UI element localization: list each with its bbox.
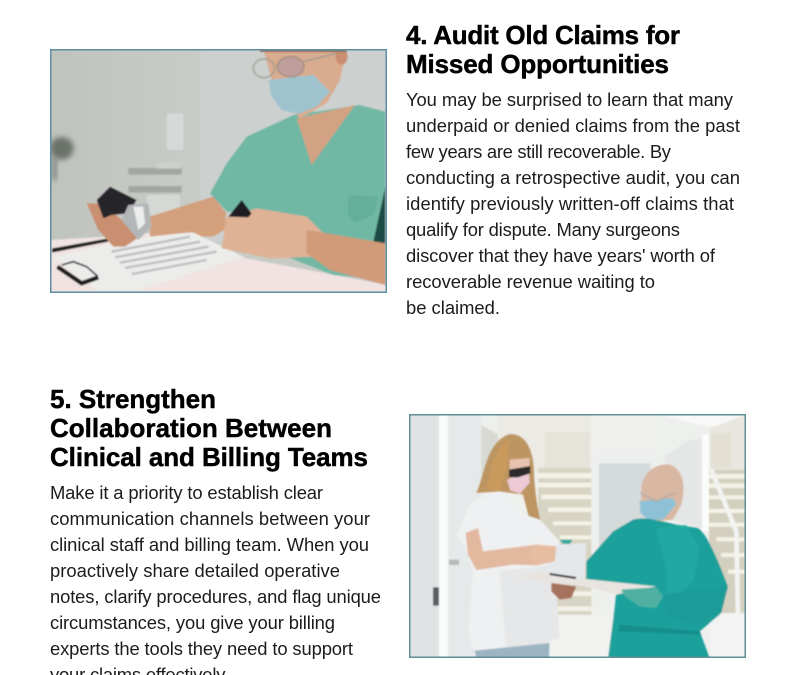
neck, head <box>263 49 347 118</box>
nurse face and mask <box>510 458 530 495</box>
text block: section 4 body: few years are still recoverable. By <box>406 141 672 162</box>
text block: section 5 body: proactively share detailed operative <box>50 560 340 581</box>
text block: section 4 body: recoverable revenue waiting to <box>406 271 655 292</box>
glasses <box>277 57 304 77</box>
photo: nurse and surgeon reviewing a document <box>409 414 746 658</box>
text block: section 5 body <box>50 482 381 675</box>
text block: section 4 body: be claimed. <box>406 297 500 318</box>
text block: section 4 body: underpaid or denied claims from the past <box>406 115 740 136</box>
heading: section 5: 5. Strengthen <box>50 384 216 414</box>
heading: section 4 <box>406 20 680 79</box>
heading: section 5 <box>50 384 368 472</box>
photo: clinician with stamp and paperwork <box>50 49 387 293</box>
nurse hair <box>476 434 545 533</box>
text block: section 4 body: You may be surprised to learn that many <box>406 89 734 110</box>
heading: section 5: Clinical and Billing Teams <box>50 442 368 472</box>
far hand <box>222 208 327 258</box>
text block: section 5 body: communication channels between your <box>50 508 370 529</box>
text block: section 4 body: conducting a retrospective audit, you can <box>406 167 740 188</box>
nurse arm and hands <box>466 528 556 570</box>
paperwork <box>52 229 243 291</box>
text block: section 5 body: circumstances, you give your billing <box>50 612 335 633</box>
text block: section 4 body: qualify for dispute. Many surgeons <box>406 219 680 240</box>
nurse uniform <box>456 492 560 651</box>
text block: section 4 body: identify previously written-off claims that <box>406 193 734 214</box>
text block: section 5 body: Make it a priority to establish clear <box>50 482 323 503</box>
scrubs and far arm <box>150 197 230 237</box>
surgeon gown <box>586 518 728 658</box>
text block: section 4 body <box>406 89 740 318</box>
text block: section 5 body: notes, clarify procedures, and flag unique <box>50 586 381 607</box>
heading: section 5: Collaboration Between <box>50 413 332 443</box>
heading: section 4: Missed Opportunities <box>406 49 669 79</box>
near hand and stamp <box>87 203 140 247</box>
mask <box>268 75 330 114</box>
text block: section 4 body: discover that they have years' worth of <box>406 245 716 266</box>
text block: section 5 body: clinical staff and billing team. When you <box>50 534 369 555</box>
surgeon head <box>641 464 684 521</box>
text block: section 5 body: experts the tools they need to support <box>50 638 353 659</box>
heading: section 4: 4. Audit Old Claims for <box>406 20 680 50</box>
clipboard and papers <box>543 543 586 580</box>
